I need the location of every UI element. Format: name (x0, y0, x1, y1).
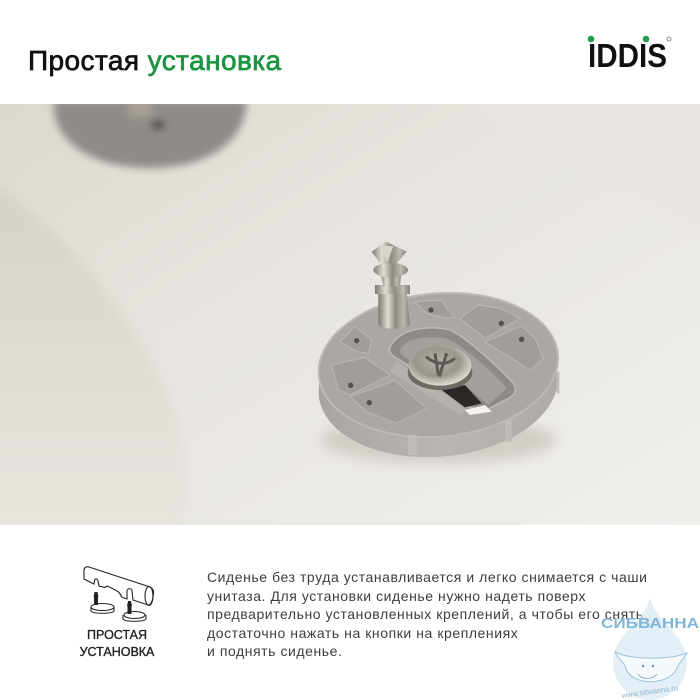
title: Простая установка (28, 45, 282, 76)
icon: seat hinge and mounts (83, 566, 154, 622)
watermark: sibvanna (601, 598, 699, 700)
lower ridge (390, 362, 467, 415)
description text: предварительно установленных креплений, а чтобы его снять (207, 606, 644, 622)
top right surface (470, 104, 700, 245)
slot floor (400, 337, 507, 405)
bowl (0, 178, 188, 545)
watermark: sibvanna: СИБВАННА (601, 615, 699, 632)
photo: mounting plate on toilet bowl (0, 104, 700, 525)
icon label: УСТАНОВКА (80, 645, 154, 659)
description text: Сиденье без труда устанавливается и легко снимается с чаши (207, 569, 648, 585)
left stud (94, 592, 98, 605)
plate top (313, 283, 564, 447)
left mount base (91, 607, 114, 613)
center slot (389, 328, 515, 410)
icon label: ПРОСТАЯ (87, 628, 147, 642)
slot opening (442, 385, 482, 407)
watermark: sibvanna: www.sibvanna.ru (620, 683, 678, 700)
description text: достаточно нажать на кнопки на креплениях (207, 624, 518, 640)
rim notches (408, 372, 559, 455)
right stud (127, 601, 132, 614)
holes (348, 307, 524, 405)
description text: унитаза. Для установки сиденье нужно надеть поверх (207, 588, 586, 604)
description text (207, 569, 648, 659)
ceramic background (0, 104, 700, 525)
hinge bar (84, 567, 154, 605)
mounting plate (313, 242, 564, 467)
description text: и поднять сиденье. (207, 643, 342, 659)
recessed panels (332, 300, 543, 423)
plate edge (313, 303, 564, 467)
screw (408, 355, 472, 390)
bar end (145, 586, 153, 606)
blurred rear mount (54, 100, 246, 168)
icon label (80, 628, 154, 659)
plate shadow (320, 416, 556, 464)
right mount base (123, 615, 146, 621)
stud (372, 242, 410, 329)
